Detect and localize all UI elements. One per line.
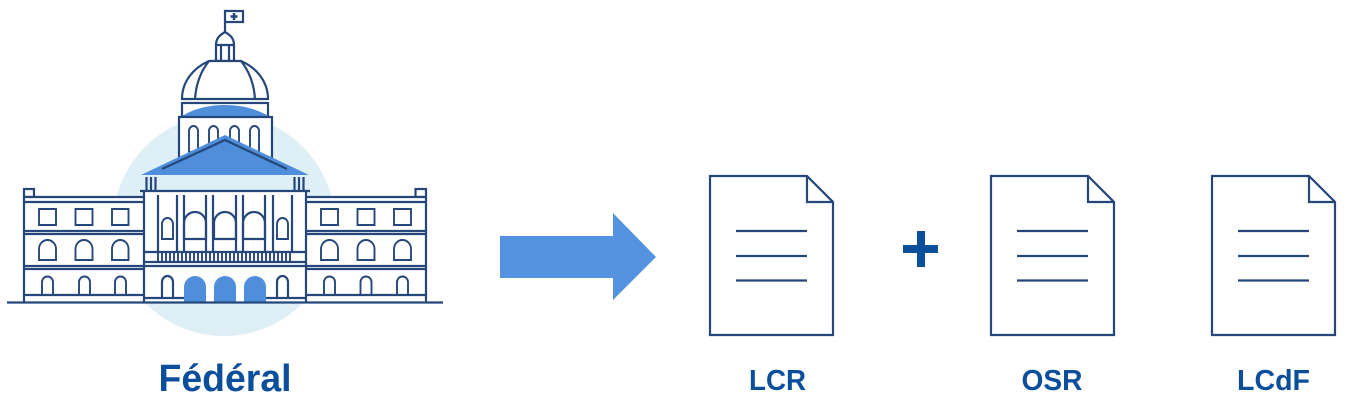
plus sign <box>903 231 938 267</box>
central block <box>144 191 306 302</box>
label: OSR: OSR <box>1022 365 1083 397</box>
upper drum with windows <box>179 117 272 162</box>
left wing <box>24 189 144 302</box>
document: LCdF <box>1212 176 1335 335</box>
background circle <box>113 114 335 336</box>
document: OSR <box>991 176 1114 335</box>
dome <box>182 61 268 99</box>
blue arched doors <box>184 276 266 302</box>
flag <box>225 11 243 33</box>
right wing <box>306 189 426 302</box>
dome lantern <box>216 32 234 61</box>
drum <box>182 103 268 118</box>
label: LCR: LCR <box>749 365 806 397</box>
blue drum roof <box>179 105 272 118</box>
label: LCdF: LCdF <box>1237 365 1310 397</box>
heading: Fédéral: Fédéral <box>158 358 292 400</box>
document: LCR <box>710 176 833 335</box>
blue pediment <box>141 135 309 175</box>
cornice and pillars <box>140 177 310 191</box>
arrow <box>500 213 656 300</box>
illustration: federal palace building <box>7 11 443 336</box>
ground line <box>7 301 443 304</box>
